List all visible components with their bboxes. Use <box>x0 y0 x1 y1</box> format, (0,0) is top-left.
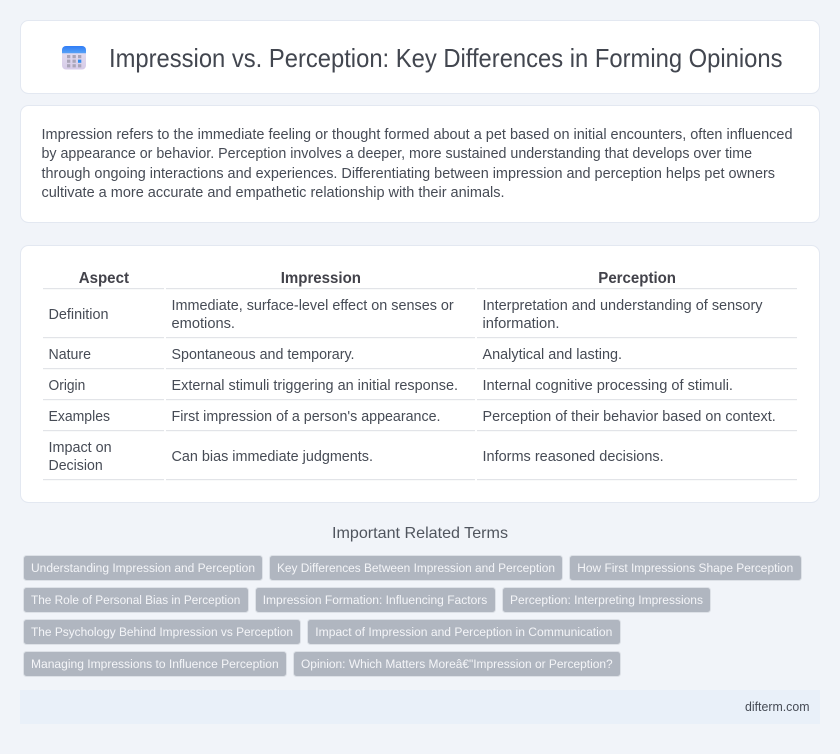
tag: The Psychology Behind Impression vs Perception <box>31 625 293 639</box>
table header: Impression <box>281 270 361 287</box>
panel: intro paragraph: cultivate a more accurate and empathetic relationship with their animals. <box>42 185 505 201</box>
footer bar <box>20 690 820 724</box>
tag <box>308 620 620 644</box>
tag <box>294 652 620 676</box>
tag: The Role of Personal Bias in Perception <box>31 593 240 607</box>
panel: intro paragraph: Impression refers to the immediate feeling or thought formed about a pet based on initial encounters, often influenced <box>42 127 792 143</box>
panel: comparison table <box>20 246 820 502</box>
row: examples: First impression of a person's appearance. <box>172 409 440 425</box>
panel: intro paragraph <box>20 106 820 222</box>
tag group: related terms <box>24 556 802 676</box>
table header: Aspect <box>79 270 129 287</box>
table header <box>79 270 676 287</box>
table header: Perception <box>598 270 676 287</box>
row: impact on decision: Impact on <box>48 440 112 456</box>
footer bar: difterm.com <box>745 699 810 714</box>
row: origin: Internal cognitive processing of stimuli. <box>482 378 733 394</box>
panel: intro paragraph: by appearance or behavior. Perception involves a deeper, more sustained understanding that develops over time <box>42 146 752 162</box>
tag: Key Differences Between Impression and Perception <box>277 561 555 575</box>
tag: Impression Formation: Influencing Factors <box>263 593 487 607</box>
tag <box>502 588 710 612</box>
row: definition: Interpretation and understanding of sensory <box>482 298 763 314</box>
tag: Opinion: Which Matters Moreâ€"Impression or Perception? <box>301 657 613 671</box>
row: definition <box>48 298 763 332</box>
heading: related terms: Important Related Terms <box>332 525 508 542</box>
row: nature <box>48 347 622 363</box>
row: nature: Analytical and lasting. <box>482 347 622 363</box>
row: origin: External stimuli triggering an initial response. <box>172 378 458 394</box>
row: impact on decision: Decision <box>48 458 103 474</box>
row: nature: Nature <box>48 347 91 363</box>
title: Impression vs. Perception: Key Differences in Forming Opinions <box>109 45 782 73</box>
panel: intro paragraph: through ongoing interactions and experiences. Differentiating between impression and perception helps pet owners <box>42 166 775 182</box>
row: examples: Examples <box>48 409 110 425</box>
row: impact on decision <box>48 440 664 474</box>
tag <box>570 556 802 580</box>
row: origin <box>48 378 733 394</box>
tag: How First Impressions Shape Perception <box>577 561 793 575</box>
row: definition: Definition <box>48 307 108 323</box>
tag: Impact of Impression and Perception in Communication <box>315 625 612 639</box>
icon: calendar grid <box>62 46 86 70</box>
tag <box>24 588 248 612</box>
header panel <box>20 20 820 94</box>
tag <box>270 556 562 580</box>
row: definition: emotions. <box>172 316 235 332</box>
row: definition: information. <box>482 316 560 332</box>
row: impact on decision: Informs reasoned decisions. <box>482 449 664 465</box>
tag <box>24 556 262 580</box>
row: impact on decision: Can bias immediate judgments. <box>172 449 373 465</box>
tag <box>24 620 300 644</box>
row: definition: Immediate, surface-level effect on senses or <box>172 298 454 314</box>
tag: Understanding Impression and Perception <box>31 561 255 575</box>
tag <box>24 652 286 676</box>
tag: Managing Impressions to Influence Perception <box>31 657 279 671</box>
row: examples: Perception of their behavior based on context. <box>482 409 776 425</box>
row: nature: Spontaneous and temporary. <box>172 347 354 363</box>
tag: Perception: Interpreting Impressions <box>510 593 703 607</box>
row: examples <box>48 409 776 425</box>
tag <box>256 588 496 612</box>
row: origin: Origin <box>48 378 85 394</box>
